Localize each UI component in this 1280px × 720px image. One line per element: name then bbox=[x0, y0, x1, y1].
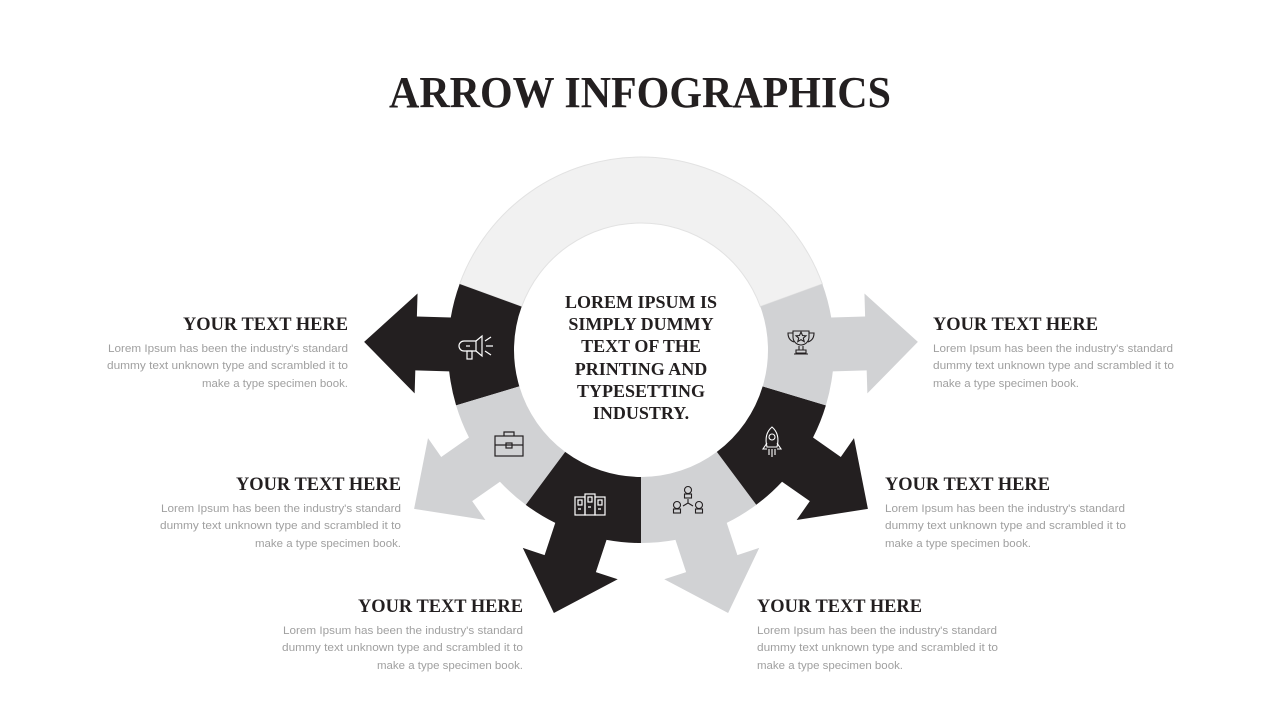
text block: right middle: Lorem Ipsum has been the industry's standard bbox=[885, 503, 1125, 515]
text block: bottom right bbox=[757, 596, 998, 672]
text block: left top: Lorem Ipsum has been the industry's standard bbox=[108, 343, 348, 355]
text block: left middle: YOUR TEXT HERE bbox=[236, 474, 401, 495]
text block: left middle: Lorem Ipsum has been the industry's standard bbox=[161, 503, 401, 515]
text block: bottom right: Lorem Ipsum has been the industry's standard bbox=[757, 625, 997, 637]
arrow segment: left (dark) bbox=[362, 281, 522, 407]
text block: bottom right: YOUR TEXT HERE bbox=[757, 596, 922, 617]
center text: TYPESETTING bbox=[577, 381, 705, 401]
center text: INDUSTRY. bbox=[593, 403, 689, 423]
text block: bottom right: dummy text unknown type and scrambled it to bbox=[757, 642, 998, 654]
center text: TEXT OF THE bbox=[581, 336, 701, 356]
text block: left top: YOUR TEXT HERE bbox=[183, 314, 348, 335]
text block: left top: dummy text unknown type and scrambled it to bbox=[107, 360, 348, 372]
center text: LOREM IPSUM IS bbox=[565, 292, 717, 312]
center text: SIMPLY DUMMY bbox=[568, 314, 714, 334]
text block: left middle: make a type specimen book. bbox=[255, 538, 401, 550]
arrow segment: lower-left (gray) bbox=[379, 369, 577, 559]
icon: megaphone bbox=[459, 336, 493, 359]
arrow segment: right (gray) bbox=[760, 281, 920, 407]
text block: right top: make a type specimen book. bbox=[933, 378, 1079, 390]
text block: bottom left: make a type specimen book. bbox=[377, 660, 523, 672]
diagram: ring of arrows bbox=[362, 157, 920, 632]
icon: rocket bbox=[763, 427, 781, 457]
icon: trophy bbox=[788, 331, 814, 354]
text block: right middle: YOUR TEXT HERE bbox=[885, 474, 1050, 495]
text block: left middle: dummy text unknown type and scrambled it to bbox=[160, 520, 401, 532]
title: ARROW INFOGRAPHICS bbox=[389, 68, 891, 117]
text block: right top bbox=[933, 314, 1174, 390]
arrow segment: bottom-left (dark) bbox=[496, 445, 661, 632]
icon: buildings bbox=[575, 494, 605, 515]
arrow segment: lower-right (dark) bbox=[705, 369, 903, 559]
text block: bottom left: Lorem Ipsum has been the industry's standard bbox=[283, 625, 523, 637]
center text bbox=[565, 292, 717, 423]
text block: right top: Lorem Ipsum has been the industry's standard bbox=[933, 343, 1173, 355]
arrow segment: bottom-right (gray) bbox=[621, 445, 786, 632]
text block: right top: YOUR TEXT HERE bbox=[933, 314, 1098, 335]
top light arc bbox=[460, 157, 822, 307]
text block: left top: make a type specimen book. bbox=[202, 378, 348, 390]
icon: team network bbox=[674, 486, 702, 513]
text block: left middle bbox=[160, 474, 401, 550]
text block: right middle bbox=[885, 474, 1126, 550]
text block: bottom left: YOUR TEXT HERE bbox=[358, 596, 523, 617]
text block: left top bbox=[107, 314, 348, 390]
text block: bottom right: make a type specimen book. bbox=[757, 660, 903, 672]
text block: bottom left: dummy text unknown type and scrambled it to bbox=[282, 642, 523, 654]
text block: right middle: dummy text unknown type and scrambled it to bbox=[885, 520, 1126, 532]
text block: right top: dummy text unknown type and scrambled it to bbox=[933, 360, 1174, 372]
text block: bottom left bbox=[282, 596, 523, 672]
icon: briefcase bbox=[495, 432, 523, 456]
center text: PRINTING AND bbox=[575, 359, 707, 379]
text block: right middle: make a type specimen book. bbox=[885, 538, 1031, 550]
